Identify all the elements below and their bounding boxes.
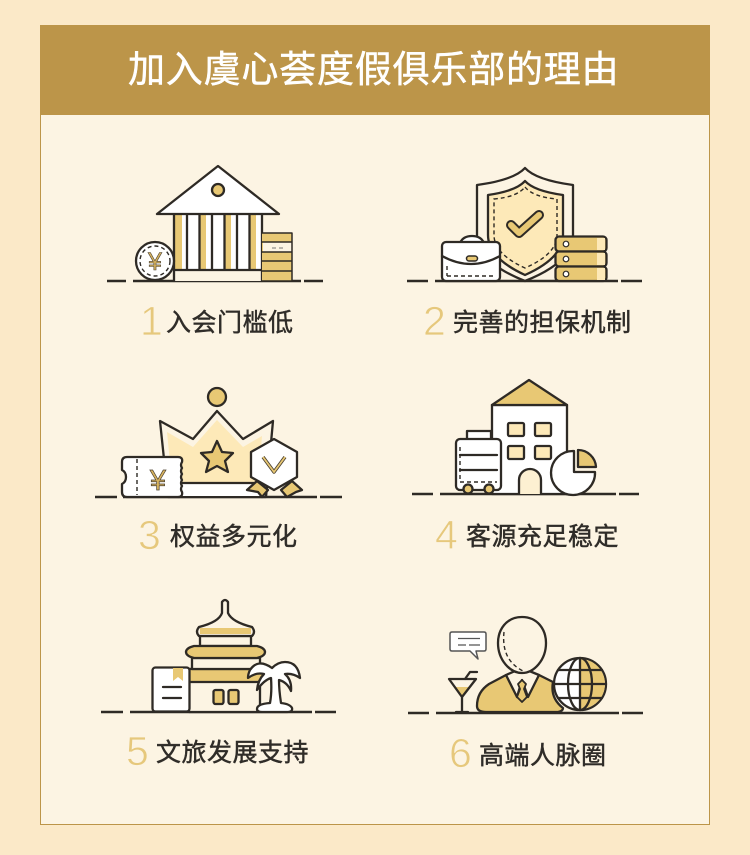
panel: item 1 low entry threshold (107, 166, 323, 344)
label 1: 入会门槛低 (166, 309, 294, 337)
icon: hotel, suitcase and pie chart (412, 380, 639, 495)
number 4: 4 (435, 512, 458, 558)
label 6: 高端人脉圈 (479, 742, 607, 770)
number 1: 1 (140, 298, 163, 344)
label 2: 完善的担保机制 (453, 309, 632, 337)
icon: crown, star, ticket and badge (95, 388, 342, 497)
title: 加入虞心荟度假俱乐部的理由 (128, 49, 619, 90)
panel: item 4 stable customer source (412, 380, 639, 558)
title banner (40, 25, 710, 115)
icon: bank building with coin and stacked coins (107, 166, 323, 281)
panel: item 2 guarantee mechanism (407, 168, 642, 344)
number 3: 3 (138, 512, 161, 558)
icon: crown, star, ticket and badge: ¥ (149, 465, 167, 497)
panel: item 5 cultural tourism support (101, 600, 336, 774)
icon: shield, briefcase and server stack (407, 168, 642, 281)
panel: item 6 high-end network (408, 617, 643, 776)
label 5: 文旅发展支持 (156, 739, 309, 767)
icon: business person, cocktail, speech bubble and globe (408, 617, 643, 713)
panel: item 3 diversified benefits (95, 388, 342, 558)
icon: bank building with coin and stacked coins: ¥ (147, 248, 162, 276)
number 6: 6 (449, 730, 472, 776)
number 2: 2 (423, 298, 446, 344)
label 4: 客源充足稳定 (466, 523, 619, 551)
label 3: 权益多元化 (170, 523, 298, 551)
icon: temple, book and palm tree (101, 600, 336, 712)
number 5: 5 (126, 728, 149, 774)
